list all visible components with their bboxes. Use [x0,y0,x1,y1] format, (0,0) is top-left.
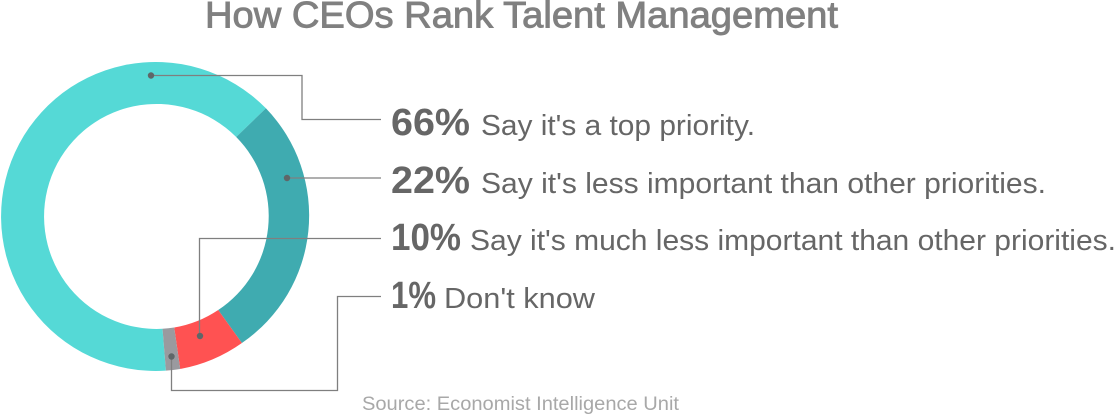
leader line: 22% [284,175,381,181]
legend row: 22%: 22% [391,160,470,202]
legend row: 10% [391,217,1116,259]
legend row: 66%: 66% [391,102,470,144]
legend row: 1% [391,275,596,317]
leader line: 1% [168,296,381,390]
legend row: 10%: 10% [391,217,461,259]
legend row: 66%: Say it's a top priority. [481,110,755,142]
legend row: 1%: Don't know [444,283,596,315]
legend row: 22% [391,160,1046,202]
legend row: 10%: Say it's much less important than other priorities. [470,225,1116,257]
segment: less important 22% [218,108,309,343]
leader line: 66% [148,72,381,120]
segment: much less important 10% [174,310,242,369]
legend row: 22%: Say it's less important than other priorities. [481,168,1046,200]
leader line: 10% [197,238,381,339]
legend row: 1%: 1% [391,275,436,317]
legend row: 66% [391,102,755,144]
segment: don't know 1% [162,328,180,371]
donut chart [1,62,309,371]
source note: Source: Economist Intelligence Unit [362,394,680,415]
segment: top priority 66% [1,62,266,371]
